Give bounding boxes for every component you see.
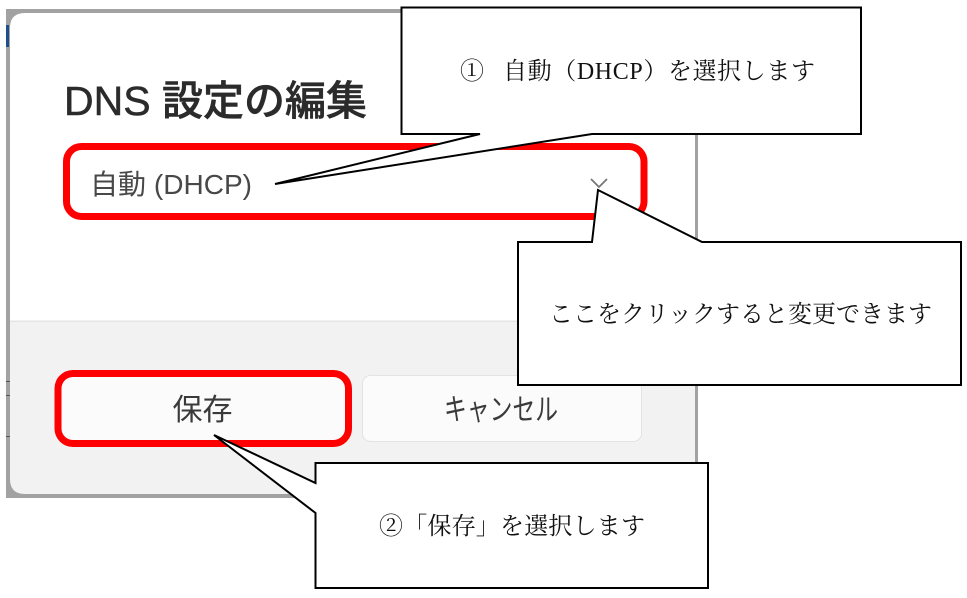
callout: step 2 select save: ②「保存」を選択します [379,513,645,540]
callout: click here to change: ここをクリックすると変更できます [549,301,932,328]
panel: dialog window [6,9,698,498]
highlight: save button red outline [58,374,348,444]
callout: step 1 select automatic DHCP: ① [460,58,484,85]
callout: step 2 select save [214,435,708,588]
callout: click here to change [518,190,961,385]
dropdown: DNS setting mode: 自動 (DHCP) [90,169,252,200]
button: save: 保存 [172,394,232,427]
callout: step 1 select automatic DHCP: 自動（DHCP）を選択します [503,58,815,85]
callout: step 1 select automatic DHCP [275,8,861,184]
button: cancel [362,376,642,442]
dropdown: DNS setting mode [90,169,607,200]
heading: dialog title: DNS 設定の編集 [64,78,367,124]
highlight: dropdown red outline [66,146,644,216]
button: save [58,374,348,444]
button: cancel: キャンセル [444,394,558,427]
